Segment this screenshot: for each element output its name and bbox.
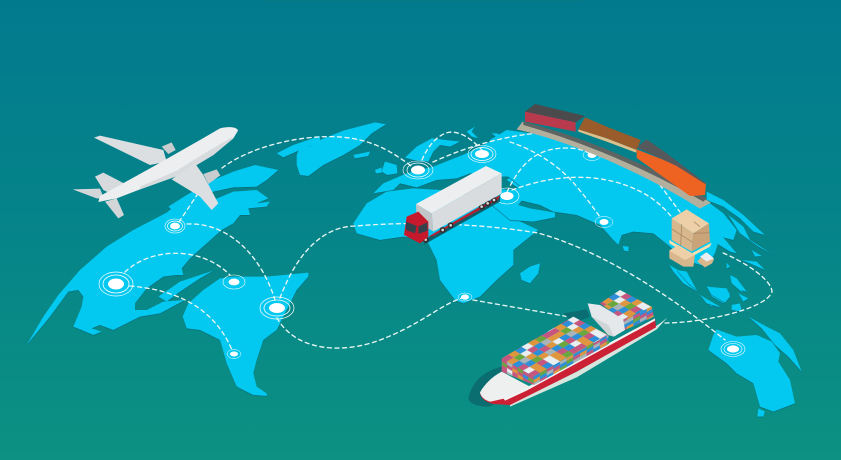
marker: south africa [458, 293, 472, 301]
airplane [73, 127, 238, 218]
forward container block [502, 317, 608, 377]
container ship [468, 290, 667, 407]
continent: greenland [297, 122, 478, 176]
marker: canada [165, 219, 185, 233]
marker: west europe [403, 161, 433, 179]
world map [27, 122, 802, 417]
marker: siberia [583, 150, 601, 160]
continent: north america [27, 136, 320, 345]
continent: asia [485, 130, 771, 307]
wheels [423, 197, 497, 243]
continent: south america [183, 273, 308, 396]
marker: middle east [495, 188, 519, 204]
aft container block [600, 290, 652, 320]
location markers [99, 146, 745, 358]
truck [404, 166, 502, 245]
bow deck [480, 372, 530, 402]
marker: australia [721, 342, 745, 356]
marker: south america south [227, 350, 241, 358]
continent: australia [677, 270, 802, 417]
marker: large brazil [260, 297, 294, 319]
marker: large west america [99, 272, 133, 296]
bridge superstructure [588, 303, 625, 337]
stacked cargo boxes [669, 209, 714, 267]
continent: europe and africa [353, 133, 580, 303]
ship shadow [468, 367, 507, 407]
hull [480, 318, 656, 405]
marker: north europe [468, 146, 496, 162]
marker: north south america [223, 275, 245, 289]
dashed shipping routes [125, 132, 772, 350]
train on curved track [517, 104, 711, 209]
marker: central asia [595, 216, 613, 228]
wake [510, 318, 667, 407]
